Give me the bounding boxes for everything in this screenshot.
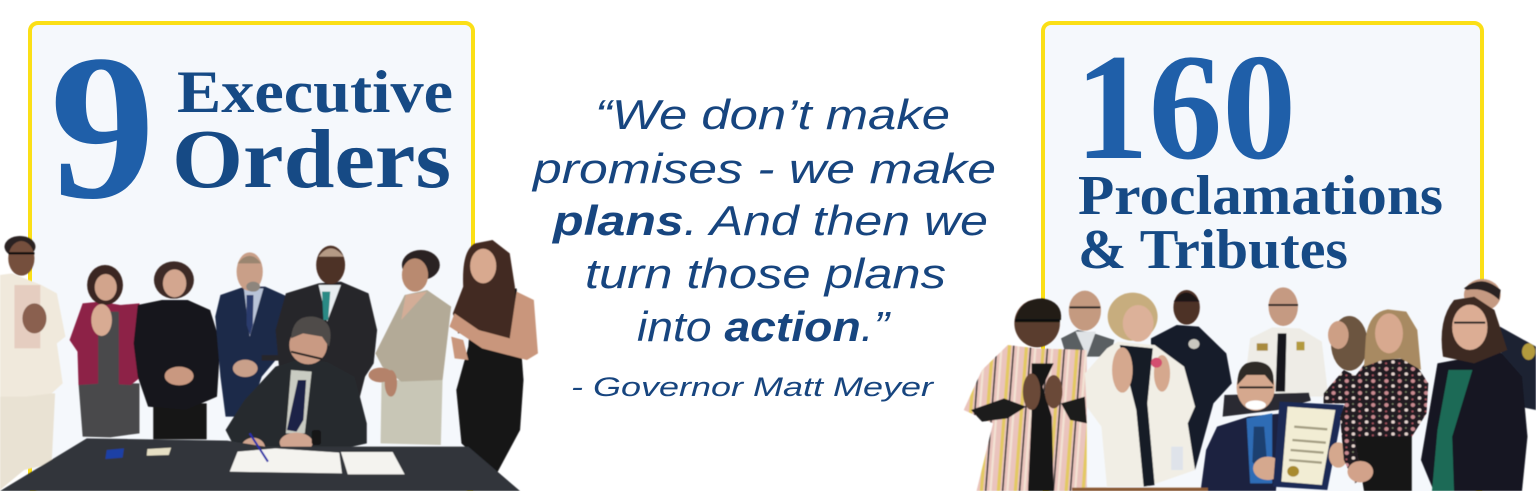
- person: woman in striped dress: [964, 298, 1087, 491]
- heading: Executive: Executive: [177, 59, 453, 125]
- quote: promises - we make: [531, 145, 996, 192]
- person: seated man with certificate: [1201, 362, 1348, 491]
- quote: plans . And then we: [552, 197, 988, 244]
- person: man in gray suit: [1061, 291, 1114, 357]
- photo: executive order signing group: [0, 236, 538, 491]
- person: officer in dark uniform: [1151, 290, 1232, 470]
- person: woman behind turned aside: [1324, 316, 1368, 403]
- table with papers: [0, 433, 520, 491]
- big number 9: 9: [50, 12, 155, 242]
- person: woman in maroon cardigan: [70, 265, 141, 437]
- panel: executive orders: [30, 12, 473, 491]
- person: man in navy suit: [215, 252, 288, 417]
- person: seated governor signing: [226, 317, 367, 459]
- pen: [250, 433, 268, 462]
- quote: “We don’t make: [595, 91, 950, 138]
- person: officer in white uniform: [1243, 287, 1328, 397]
- person: woman in dark velvet jacket: [1421, 297, 1527, 491]
- person: woman in beige suit: [369, 250, 451, 445]
- documents: [230, 448, 342, 473]
- person: woman in black dress: [449, 240, 538, 475]
- quote attribution: - Governor Matt Meyer: [571, 372, 934, 402]
- quote: turn those plans: [585, 250, 946, 297]
- person: man in black suit: [276, 246, 377, 403]
- quote: [531, 91, 996, 402]
- photo: proclamation group: [964, 279, 1536, 491]
- pens on table: [105, 448, 124, 459]
- person: woman in floral blouse: [1340, 309, 1428, 491]
- panel: proclamations and tributes: [1043, 23, 1482, 491]
- heading: and Tributes: & Tributes: [1078, 219, 1348, 281]
- heading: Orders: Orders: [172, 113, 451, 206]
- heading: Proclamations: Proclamations: [1078, 165, 1443, 227]
- big number 160: 160: [1075, 23, 1296, 191]
- quote: into action .”: [637, 303, 891, 350]
- certificate: [1273, 402, 1344, 490]
- card on table: [147, 448, 171, 456]
- person: officer far right: [1464, 279, 1536, 410]
- table edge: [1072, 488, 1208, 491]
- person: woman in black jacket: [134, 261, 220, 439]
- person: woman in white jacket: [1085, 293, 1195, 487]
- person: woman in cream suit: [0, 236, 65, 490]
